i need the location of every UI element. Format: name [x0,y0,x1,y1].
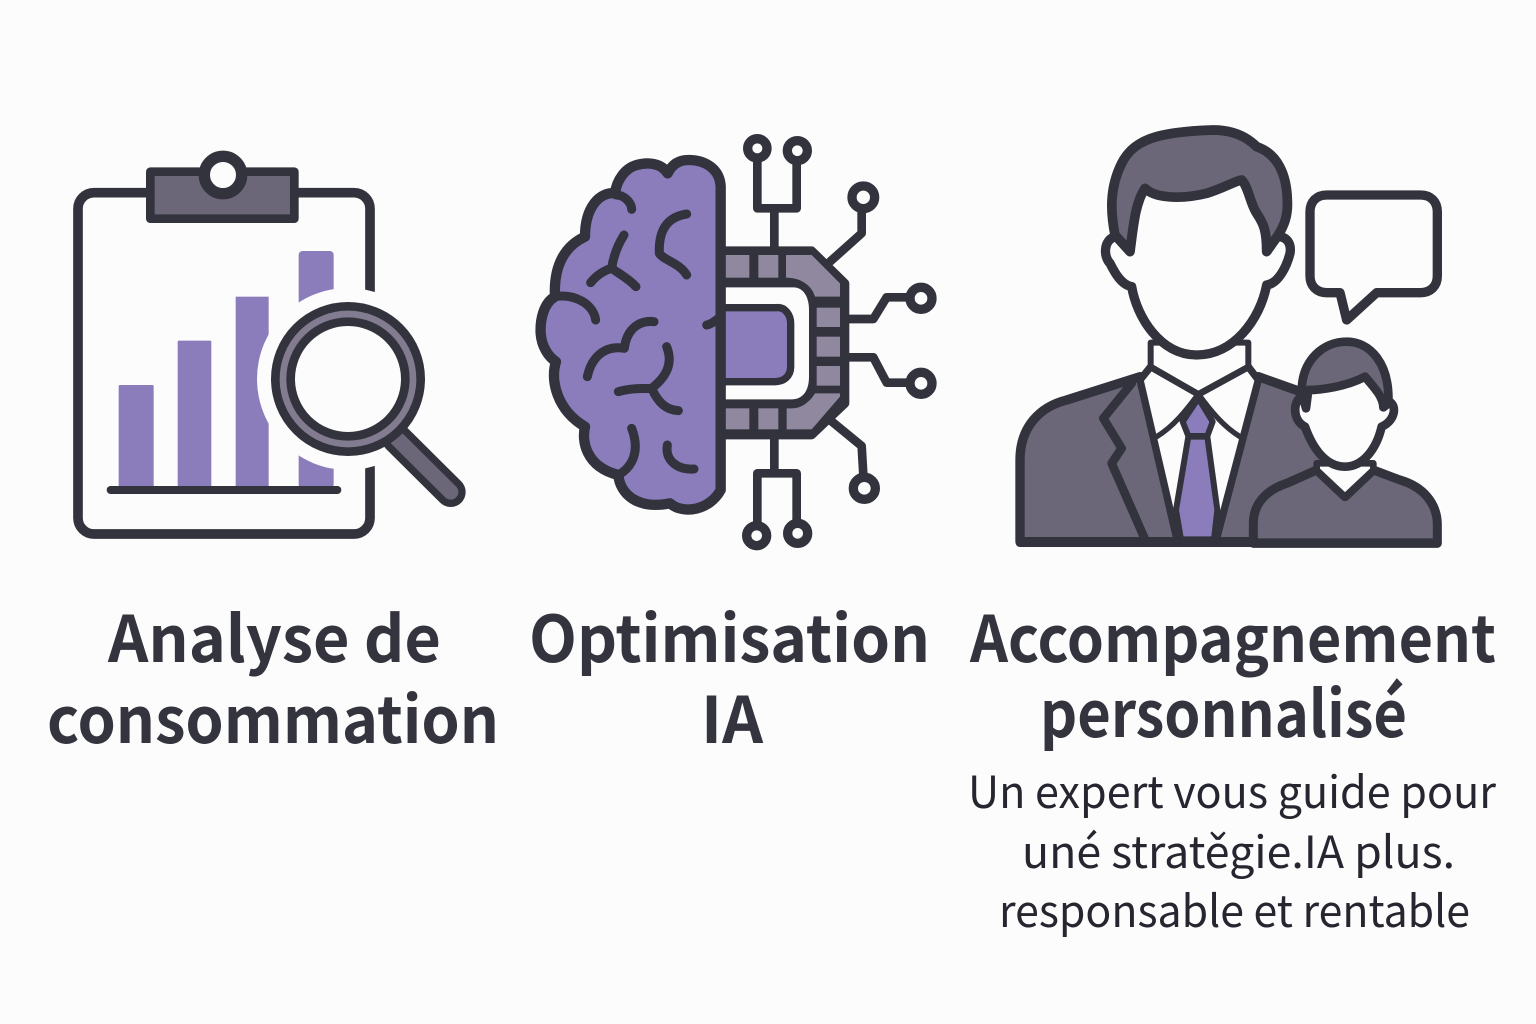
heading: Accompagnement personnalisé: personnalisé [1040,664,1407,756]
text block: description: responsable et rentable [999,876,1470,940]
circuit traces [747,139,932,546]
text block: description: uné stratěgie.IA plus. [1022,817,1455,881]
icon: clipboard with bar chart and magnifier [78,156,451,534]
text block: description: Un expert vous guide pour [968,757,1497,821]
clipboard board [78,193,370,534]
magnifying glass [283,314,451,492]
chip pads [725,255,840,429]
heading: Optimisation IA: IA [701,670,764,762]
clipboard clip [150,156,294,219]
heading: Optimisation IA: Optimisation [529,589,930,681]
expert ears and face [1105,153,1290,355]
client hair [1302,342,1388,408]
expert suit [1020,377,1333,542]
magnifier halo [257,288,439,470]
heading: Analyse de consommation: Analyse de [107,589,441,681]
heading: Analyse de consommation: consommation [47,670,499,762]
icon: expert with client and speech bubble [1020,130,1437,543]
tie [1176,398,1217,539]
panel: AI optimisation [529,139,932,762]
text block: description [968,757,1497,940]
chip window [721,287,809,399]
client torso [1253,470,1437,543]
icon: half brain half circuit chip [541,139,932,546]
brain [541,160,721,510]
chip body [721,251,845,435]
bar chart [119,251,334,488]
heading: Analyse de consommation [47,589,499,762]
client head [1295,360,1394,467]
heading: Accompagnement personnalisé [969,589,1496,756]
client neck [1317,463,1373,497]
heading: Optimisation IA [529,589,930,762]
expert hair [1112,130,1287,252]
chart baseline [111,478,337,502]
heading: Accompagnement personnalisé: Accompagnement [969,589,1496,681]
panel: consumption analysis [47,156,499,762]
ground line [1020,530,1437,556]
collar [1157,394,1240,437]
neck [1151,343,1248,394]
lapel [1103,383,1145,539]
shirt [1140,367,1258,538]
speech bubble [1310,195,1437,320]
panel: personalised support [968,130,1497,940]
chip core [721,308,791,382]
